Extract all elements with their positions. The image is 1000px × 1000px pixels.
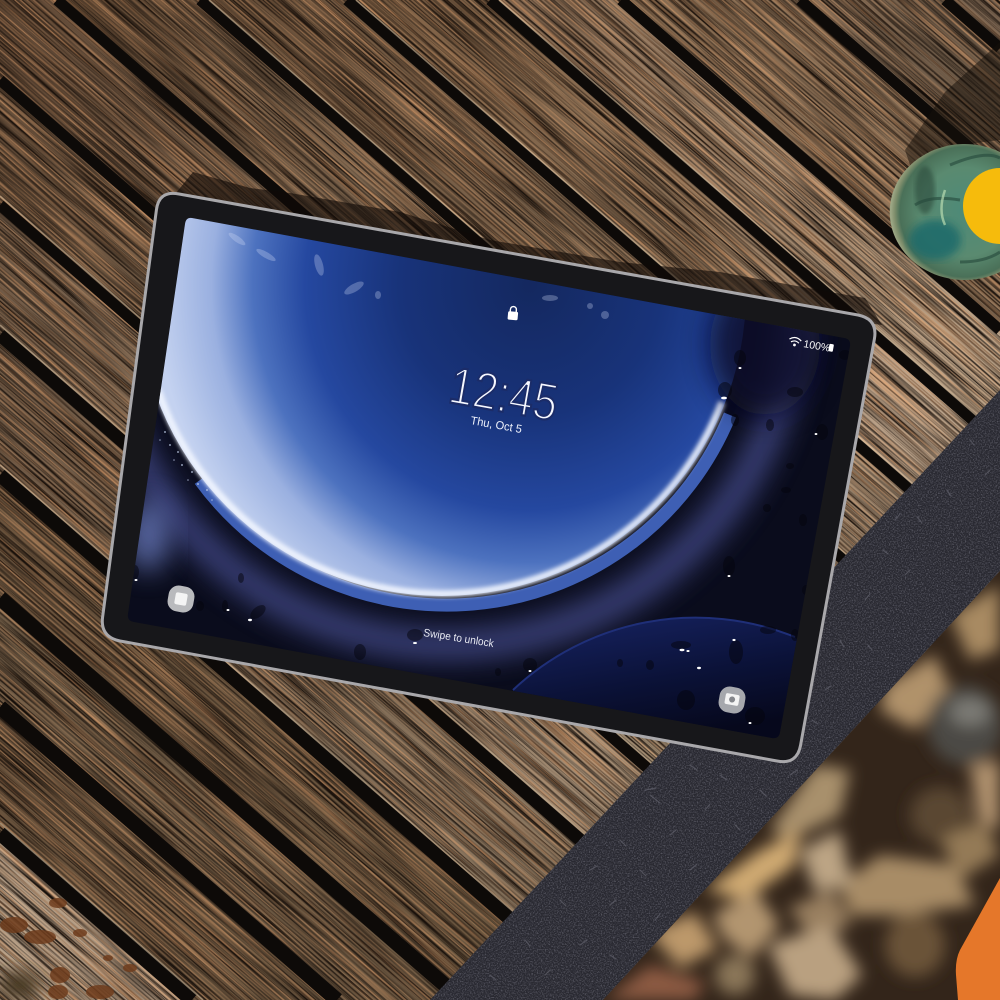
dark wet strip of fabric (430, 390, 1000, 1000)
notes shortcut icon (166, 584, 196, 614)
tablet body with silver frame (102, 193, 875, 762)
green glass bottle with yellow cap (890, 144, 1000, 280)
swipe to unlock hint: Swipe to unlock (423, 627, 495, 650)
tablet (100, 192, 876, 764)
battery icon (828, 344, 834, 352)
tablet shadow on wood (172, 172, 882, 325)
rust stains on light plank (0, 898, 137, 999)
status icons: wifi (788, 337, 802, 347)
yellow cap (963, 168, 1000, 244)
camera shortcut icon (717, 685, 747, 715)
tablet screen wallpaper (128, 218, 850, 738)
blurred rocky ground (603, 571, 1000, 1000)
blurred foreground at bottom-left (0, 971, 40, 999)
clock: 12:45 (445, 357, 562, 433)
water droplets on strip (430, 390, 1000, 1000)
orange object in corner (956, 878, 1000, 1000)
lock icon (507, 306, 519, 320)
bottle shadow on wood (905, 42, 1000, 180)
date: Thu, Oct 5 (469, 415, 523, 436)
battery level text: 100% (802, 338, 831, 355)
water droplets on screen (131, 231, 851, 725)
